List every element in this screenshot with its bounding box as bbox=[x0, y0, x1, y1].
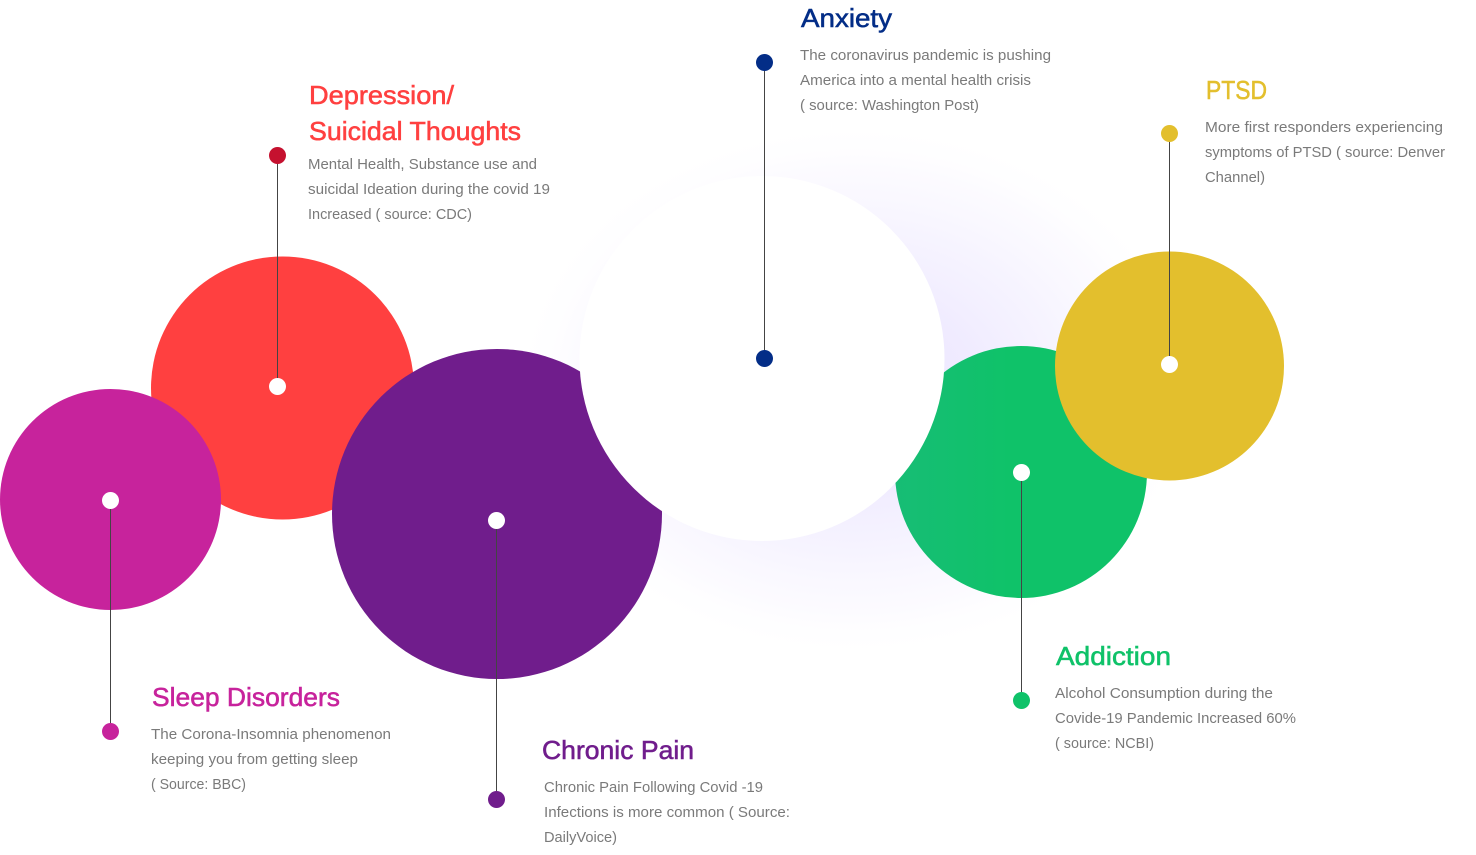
marker: chronic pain centre bbox=[488, 512, 505, 529]
heading: anxiety: Anxiety bbox=[801, 3, 892, 33]
text: anxiety: The coronavirus pandemic is pushing bbox=[800, 47, 1051, 64]
marker: chronic pain bottom bbox=[488, 791, 505, 808]
heading: sleep disorders: Sleep Disorders bbox=[152, 682, 340, 712]
connector: addiction bbox=[1020, 472, 1022, 700]
text: addiction: Alcohol Consumption during the bbox=[1055, 685, 1273, 702]
text: anxiety: America into a mental health crisis bbox=[800, 72, 1031, 89]
text: chronic pain: DailyVoice) bbox=[544, 829, 617, 846]
text: PTSD: Channel) bbox=[1205, 169, 1265, 186]
connector: PTSD bbox=[1168, 133, 1170, 364]
marker: sleep disorders centre bbox=[102, 492, 119, 509]
marker: depression centre bbox=[269, 378, 286, 395]
heading: addiction: Addiction bbox=[1056, 641, 1171, 671]
circle: chronic pain bbox=[332, 349, 662, 679]
text: PTSD: symptoms of PTSD ( source: Denver bbox=[1205, 144, 1445, 161]
marker: addiction centre bbox=[1013, 464, 1030, 481]
group: anxiety bbox=[756, 3, 1051, 367]
text: sleep disorders: keeping you from getting sleep bbox=[151, 751, 358, 768]
text: depression: Increased ( source: CDC) bbox=[308, 206, 472, 223]
text: depression: Mental Health, Substance use and bbox=[308, 156, 537, 173]
circle: depression bbox=[151, 256, 414, 520]
connector: sleep disorders bbox=[110, 500, 112, 731]
text: depression: suicidal Ideation during the covid 19 bbox=[308, 181, 550, 198]
marker: PTSD centre bbox=[1161, 356, 1178, 373]
text: chronic pain: Infections is more common ( Source: bbox=[544, 804, 790, 821]
text: chronic pain: Chronic Pain Following Covid -19 bbox=[544, 779, 763, 796]
text: addiction: ( source: NCBI) bbox=[1055, 735, 1154, 752]
marker: anxiety top bbox=[756, 54, 773, 71]
marker: PTSD top bbox=[1161, 125, 1178, 142]
marker: sleep disorders bottom bbox=[102, 723, 119, 740]
background glow bbox=[510, 120, 1200, 660]
group: PTSD bbox=[1161, 75, 1445, 373]
circle: addiction bbox=[895, 346, 1147, 598]
heading: chronic pain: Chronic Pain bbox=[542, 735, 694, 765]
connector: anxiety bbox=[764, 62, 766, 358]
heading: depression: Suicidal Thoughts bbox=[309, 116, 521, 146]
text: PTSD: More first responders experiencing bbox=[1205, 119, 1443, 136]
group: addiction bbox=[1013, 464, 1296, 752]
heading: PTSD: PTSD bbox=[1206, 75, 1267, 105]
circle: sleep disorders bbox=[0, 389, 221, 610]
marker: depression top bbox=[269, 147, 286, 164]
group: chronic pain bbox=[488, 512, 790, 846]
text: addiction: Covide-19 Pandemic Increased 60% bbox=[1055, 710, 1296, 727]
circle: anxiety bbox=[580, 176, 944, 541]
connector: chronic pain bbox=[496, 520, 498, 799]
marker: anxiety centre bbox=[756, 350, 773, 367]
group: depression bbox=[269, 80, 550, 395]
connector: depression bbox=[276, 155, 278, 386]
heading: depression: Depression/ bbox=[309, 80, 455, 110]
circle: PTSD bbox=[1055, 252, 1284, 480]
marker: addiction bottom bbox=[1013, 692, 1030, 709]
text: anxiety: ( source: Washington Post) bbox=[800, 97, 979, 114]
text: sleep disorders: ( Source: BBC) bbox=[151, 776, 246, 793]
text: sleep disorders: The Corona-Insomnia phenomenon bbox=[151, 726, 391, 743]
group: sleep disorders bbox=[102, 492, 391, 793]
